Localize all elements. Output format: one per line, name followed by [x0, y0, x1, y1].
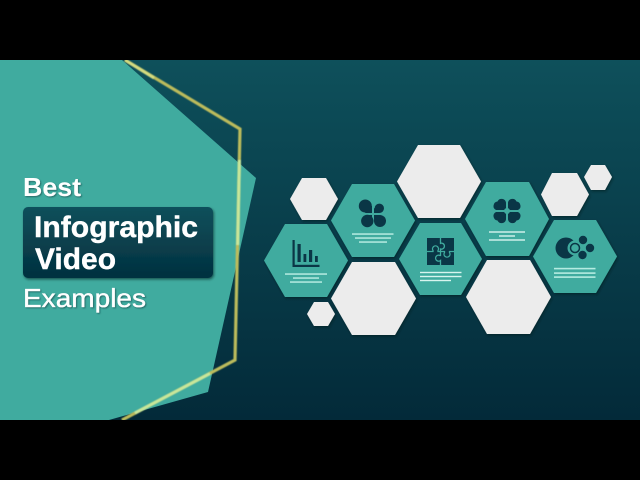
teal polygon panel: [0, 60, 256, 420]
panel: heart-clover hexagon: [465, 182, 549, 256]
title text: Infographic: Infographic: [34, 211, 198, 244]
icon: circles: [556, 236, 594, 259]
title text: Video: Video: [35, 243, 116, 276]
text lines: [489, 231, 525, 241]
panel: flower hexagon: [331, 184, 415, 257]
icon: puzzle: [427, 238, 454, 265]
white hexagon large bottom left: [331, 262, 416, 335]
text lines: [285, 273, 327, 283]
yellow hexagon outline: [122, 60, 240, 420]
white hexagon tiny lower left: [307, 302, 335, 326]
icon: four-petal flower: [359, 200, 386, 227]
white hexagon tiny top right: [584, 165, 612, 190]
text lines: [554, 268, 596, 278]
title box: [23, 207, 213, 278]
text lines: [420, 272, 462, 281]
panel: chart hexagon: [264, 224, 348, 297]
panel: circles hexagon: [533, 220, 617, 293]
panel: puzzle hexagon: [399, 223, 482, 295]
icon: clover: [494, 199, 520, 223]
white hexagon small left: [290, 178, 338, 220]
white hexagon medium right: [541, 173, 589, 216]
text lines: [352, 233, 394, 243]
icon: bar chart: [292, 240, 320, 267]
heading text: Examples: Examples: [23, 283, 146, 313]
white hexagon large top: [397, 145, 481, 218]
white hexagon large bottom right: [466, 260, 551, 334]
heading text: Best: Best: [23, 172, 81, 202]
background panel: [0, 60, 640, 420]
